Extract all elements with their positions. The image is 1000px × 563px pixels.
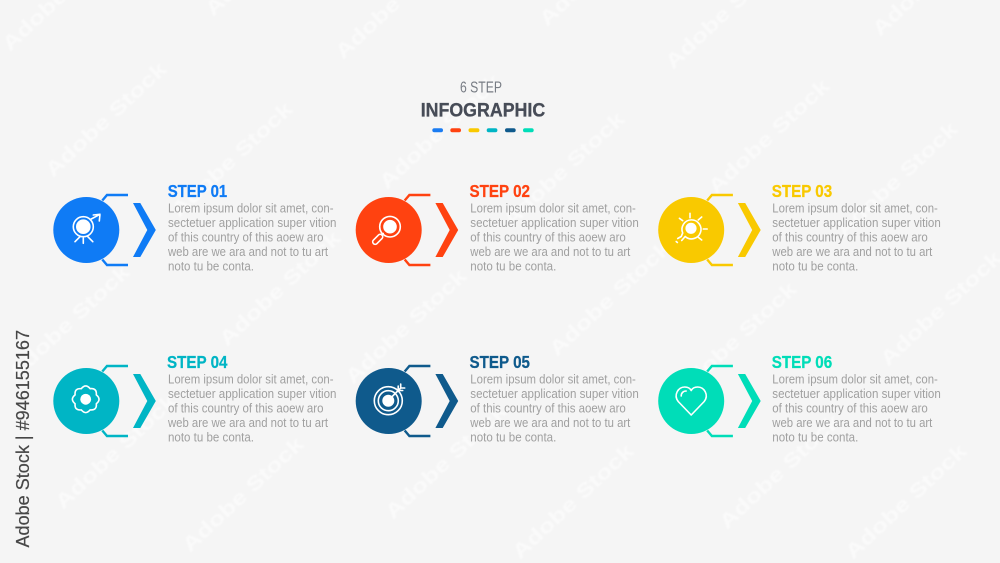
text: step 02 — [469, 201, 639, 273]
marker: step 06 — [658, 366, 761, 436]
watermark pattern: Adobe Stock — [341, 265, 472, 389]
text: step 06: of this country of this aoew aro — [772, 401, 928, 415]
text: step 01: sectetuer application super vition — [168, 216, 337, 230]
text: step 05: noto tu be conta. — [470, 430, 556, 444]
text: step 04: noto tu be conta. — [168, 430, 254, 444]
text: step 02: noto tu be conta. — [470, 259, 556, 273]
title block — [421, 80, 545, 132]
text: step 01: web are we ara and not to tu art — [167, 245, 328, 259]
icon: target with arrow — [374, 384, 405, 415]
text: step 03 — [771, 201, 941, 273]
marker: step 01 — [53, 195, 156, 265]
watermark pattern: Adobe Stock — [4, 261, 135, 385]
text: step 01 — [167, 201, 337, 273]
text: step 05: web are we ara and not to tu art — [469, 416, 631, 430]
marker: step 04 — [53, 366, 156, 436]
watermark pattern: Adobe Stock — [375, 70, 506, 194]
watermark pattern: Adobe Stock — [167, 98, 298, 222]
text: step 03: web are we ara and not to tu art — [771, 245, 933, 259]
text: step 06: noto tu be conta. — [772, 430, 858, 444]
step 02 — [356, 181, 639, 273]
heading: step 02: STEP 02 — [470, 181, 530, 201]
text: step 03: sectetuer application super vition — [772, 216, 941, 230]
step 04 — [53, 352, 337, 444]
text: step 06: Lorem ipsum dolor sit amet, con- — [772, 372, 938, 386]
text: step 01: of this country of this aoew aro — [168, 230, 324, 244]
marker: step 05 — [356, 366, 458, 436]
watermark pattern: Adobe Stock — [41, 58, 172, 182]
icon: heart — [676, 387, 706, 415]
subtitle: 6 STEP — [460, 80, 502, 97]
text: step 06: sectetuer application super vition — [772, 387, 941, 401]
text: step 04: web are we ara and not to tu art — [167, 416, 328, 430]
text: step 01: Lorem ipsum dolor sit amet, con- — [168, 201, 334, 215]
watermark pattern: Adobe Stock — [841, 440, 972, 563]
watermark pattern: Adobe Stock — [51, 390, 182, 514]
text: step 01: noto tu be conta. — [168, 259, 254, 273]
step 01 — [53, 181, 337, 273]
watermark pattern: Adobe Stock — [704, 75, 835, 199]
heading: step 03: STEP 03 — [772, 181, 832, 201]
icon: light bulb — [676, 213, 707, 242]
step 06 — [658, 352, 941, 444]
text: step 03: of this country of this aoew aro — [772, 230, 928, 244]
text: step 04 — [167, 372, 337, 444]
watermark pattern: Adobe Stock — [178, 433, 309, 557]
colour dashes — [432, 128, 534, 132]
watermark pattern: Adobe Stock — [545, 237, 676, 361]
text: step 06 — [771, 372, 941, 444]
watermark pattern: Adobe Stock — [381, 400, 512, 524]
watermark pattern: Adobe Stock — [508, 440, 639, 563]
watermark pattern: Adobe Stock — [832, 118, 963, 242]
title: INFOGRAPHIC — [421, 100, 545, 122]
watermark pattern: Adobe Stock — [499, 108, 630, 232]
heading: step 06: STEP 06 — [772, 352, 832, 372]
text: step 05 — [469, 372, 639, 444]
icon: magnifier — [375, 216, 400, 242]
heading: step 04: STEP 04 — [167, 352, 228, 372]
watermark pattern: Adobe Stock — [215, 227, 346, 351]
text: step 03: noto tu be conta. — [772, 259, 858, 273]
text: step 02: Lorem ipsum dolor sit amet, con- — [470, 201, 636, 215]
text: step 03: Lorem ipsum dolor sit amet, con- — [772, 201, 938, 215]
text: step 02: web are we ara and not to tu art — [469, 245, 631, 259]
text: step 02: of this country of this aoew aro — [470, 230, 626, 244]
heading: step 05: STEP 05 — [470, 352, 530, 372]
watermark pattern: Adobe Stock — [876, 247, 1000, 371]
stock id sidebar text: Adobe Stock | #946155167 — [13, 330, 33, 548]
watermark pattern: Adobe Stock — [671, 278, 802, 402]
text: step 05: of this country of this aoew aro — [470, 401, 626, 415]
text: step 04: sectetuer application super vition — [168, 387, 337, 401]
text: step 06: web are we ara and not to tu art — [771, 416, 933, 430]
icon: male target — [73, 214, 100, 243]
text: step 02: sectetuer application super vition — [470, 216, 639, 230]
text: step 04: of this country of this aoew aro — [168, 401, 324, 415]
text: step 05: Lorem ipsum dolor sit amet, con- — [470, 372, 636, 386]
marker: step 02 — [356, 195, 458, 265]
text: step 04: Lorem ipsum dolor sit amet, con- — [168, 372, 334, 386]
step 03 — [658, 181, 941, 273]
step 05 — [356, 352, 639, 444]
heading: step 01: STEP 01 — [168, 181, 227, 201]
watermark pattern: Adobe Stock — [715, 410, 846, 534]
icon: gear flower — [69, 383, 102, 416]
marker: step 03 — [658, 195, 761, 265]
text: step 05: sectetuer application super vition — [470, 387, 639, 401]
